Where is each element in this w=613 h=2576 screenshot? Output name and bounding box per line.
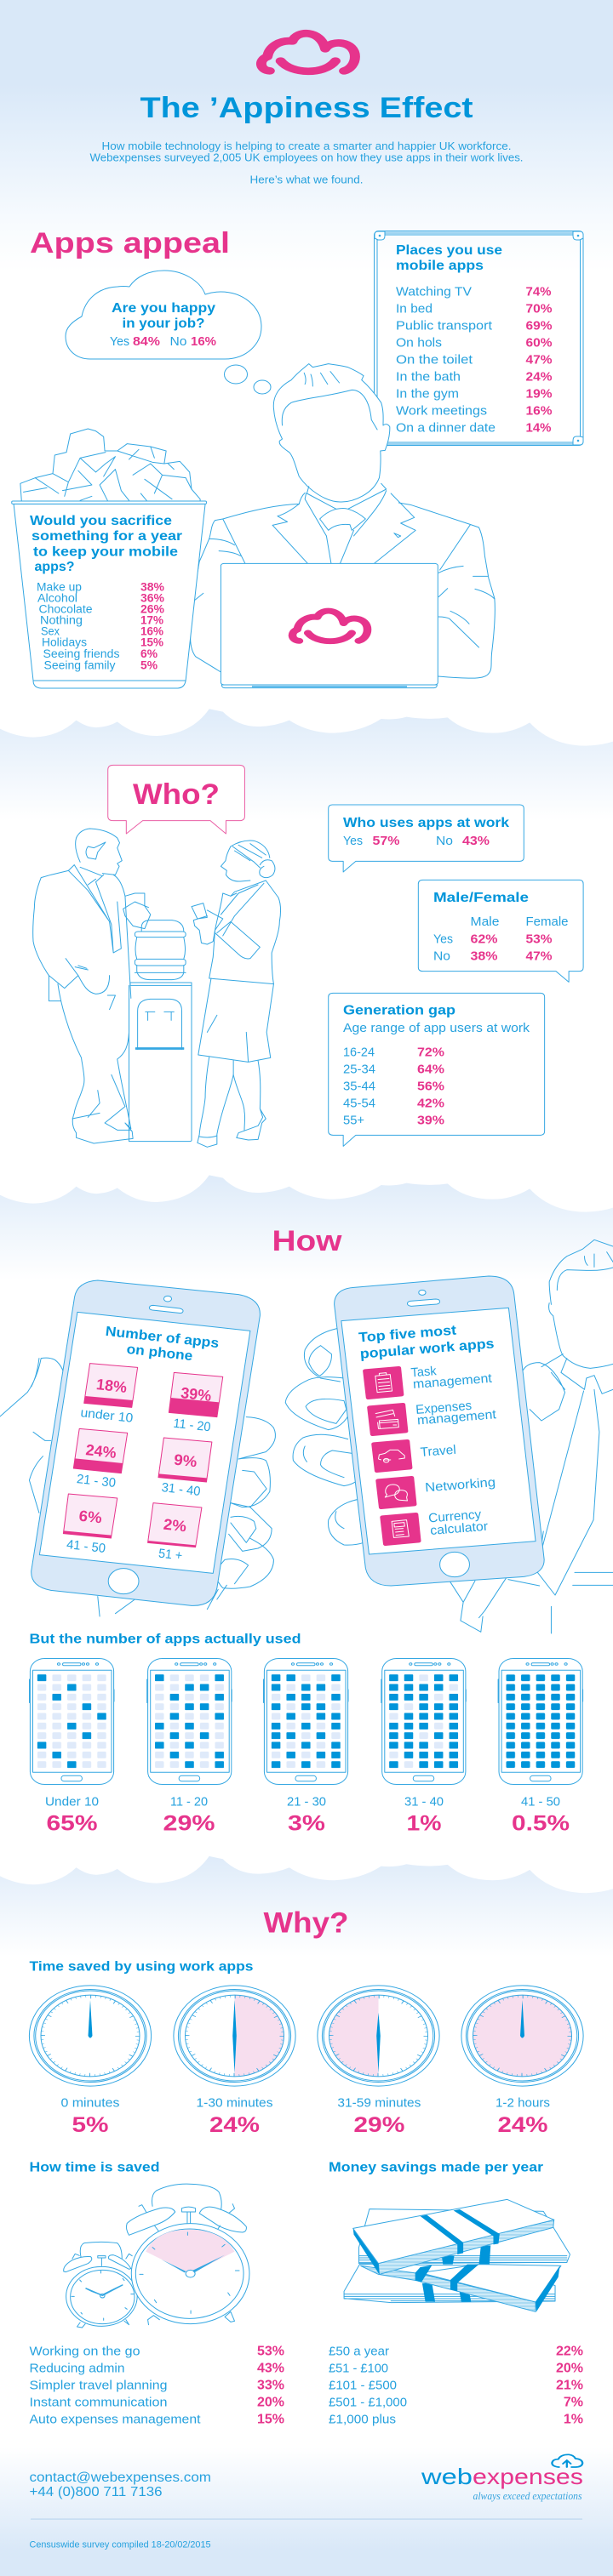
clock: 1-2 hours	[461, 1986, 583, 2137]
panel: places you use mobile apps: In bed	[396, 301, 433, 316]
panel: would you sacrifice something: 16%	[140, 624, 163, 638]
illustration: man at water cooler	[33, 829, 192, 1143]
clock: 1-30 minutes: 24%	[209, 2113, 260, 2137]
panel: would you sacrifice something: 38%	[140, 580, 164, 594]
panel: would you sacrifice something: Chocolate	[39, 602, 92, 616]
panel: places you use mobile apps: 14%	[526, 420, 552, 436]
speech bubble: who uses apps at work: No	[436, 834, 453, 848]
panel: places you use mobile apps: 74%	[526, 284, 552, 299]
icon: laptop cloud logo	[293, 611, 368, 641]
icon: expenses cards	[370, 1405, 406, 1434]
panel: places you use mobile apps: 47%	[526, 352, 552, 368]
panel: places you use mobile apps: Watching TV	[396, 284, 472, 299]
phone: top five most popular work apps: Top five most	[358, 1323, 457, 1345]
panel: places you use mobile apps: On a dinner date	[396, 420, 496, 436]
list: how time is saved: Reducing admin	[29, 2362, 124, 2375]
thought cloud: happy in your job: No	[170, 334, 187, 349]
tiles: share by number of apps	[63, 1364, 223, 1564]
speech bubble: generation gap: 45-54	[343, 1096, 375, 1111]
panel: would you sacrifice something: Seeing friends	[43, 647, 120, 660]
illustration: woman with phone	[192, 841, 281, 1147]
heading: How: How	[272, 1225, 342, 1257]
panel: places you use mobile apps: Public transport	[396, 318, 493, 333]
intro text	[90, 140, 523, 185]
panel: would you sacrifice something: Holidays	[42, 636, 87, 648]
phone chart: 31 to 40 apps: 1%	[407, 1812, 441, 1836]
illustration: alarm clocks	[64, 2184, 249, 2328]
list: how time is saved: Simpler travel planning	[29, 2379, 167, 2392]
footer divider	[31, 2518, 582, 2520]
tiles: share by number of apps: 18%	[95, 1376, 128, 1396]
phone: top five most popular work apps: management	[412, 1371, 493, 1392]
list: how time is saved: Auto expenses management	[29, 2413, 201, 2426]
speech bubble: generation gap: 56%	[417, 1079, 444, 1094]
panel: would you sacrifice something: Sex	[41, 624, 60, 638]
tiles: share by number of apps: 21 - 30	[76, 1472, 117, 1490]
thought cloud: happy in your job: 16%	[191, 334, 216, 349]
phone: number of apps on phone: Number of apps	[105, 1325, 220, 1351]
phone: top five most popular work apps: popular work apps	[359, 1336, 495, 1362]
tiles: share by number of apps: 31 - 40	[161, 1480, 201, 1499]
panel: would you sacrifice something: to keep your mobile	[33, 544, 178, 560]
phone: top five most popular work apps: Expenses	[415, 1399, 473, 1417]
speech bubble: male and female: Yes	[433, 932, 453, 946]
thought cloud: happy in your job: 84%	[133, 334, 160, 349]
clock: 0 minutes	[29, 1986, 152, 2137]
icon: networking chat bubbles	[378, 1478, 415, 1507]
laptop base bar	[252, 686, 407, 687]
phone chart: 21 to 30 apps	[264, 1659, 348, 1836]
speech bubble: male and female: 62%	[470, 932, 497, 946]
contact details: +44 (0)800 711 7136	[29, 2485, 163, 2499]
phone chart: under 10 apps: 65%	[46, 1812, 97, 1836]
list: how time is saved: 20%	[257, 2396, 284, 2409]
thought cloud: happy in your job: Yes	[110, 334, 129, 349]
phone chart: 31 to 40 apps	[381, 1659, 466, 1836]
speech bubble: Who?	[108, 765, 244, 834]
phone chart: 31 to 40 apps: 31 - 40	[404, 1795, 444, 1809]
heading: number of apps actually used: But the number of apps actually used	[29, 1632, 301, 1647]
thought cloud: happy in your job: Are you happy	[112, 301, 215, 316]
heading: money savings made per year: Money savings made per year	[329, 2161, 543, 2174]
phone: top five most popular work apps: management	[416, 1407, 497, 1428]
panel: would you sacrifice something: 6%	[140, 647, 158, 660]
phone: top five most popular work apps: Travel	[420, 1443, 456, 1460]
panel: places you use mobile apps: mobile apps	[396, 259, 484, 273]
list: money savings: £501 - £1,000	[329, 2396, 407, 2409]
panel: would you sacrifice something: 36%	[140, 592, 164, 604]
phone chart: 11 to 20 apps: 29%	[163, 1812, 215, 1836]
contact details	[29, 2471, 211, 2499]
icon: travel car	[374, 1441, 410, 1471]
speech bubble: male and female: 38%	[470, 949, 497, 963]
phone chart: 21 to 30 apps: 21 - 30	[287, 1795, 326, 1809]
intro text: Webexpenses surveyed 2,005 UK employees on how they use apps in their work lives.	[90, 151, 523, 163]
panel: places you use mobile apps: On the toilet	[396, 352, 473, 368]
illustration: hands and man behind phones	[0, 1240, 613, 1633]
list: how time is saved: 15%	[257, 2413, 284, 2426]
panel: would you sacrifice something: Nothing	[40, 614, 83, 626]
speech bubble: generation gap: 16-24	[343, 1045, 375, 1060]
clock: 31-59 minutes: 31-59 minutes	[337, 2096, 421, 2110]
thought cloud: happy in your job: in your job?	[123, 316, 204, 331]
phone chart: 11 to 20 apps: 11 - 20	[170, 1795, 208, 1809]
logo: webexpenses	[421, 2454, 583, 2502]
speech bubble: generation gap: 39%	[417, 1113, 444, 1128]
tiles: share by number of apps: 9%	[173, 1451, 198, 1470]
list: money savings	[329, 2345, 583, 2426]
phone: top five most popular work apps: Networking	[425, 1475, 496, 1495]
panel: places you use mobile apps: 19%	[526, 386, 552, 402]
tiles: share by number of apps: 24%	[85, 1441, 117, 1462]
panel: would you sacrifice something: 26%	[140, 602, 164, 616]
panel: would you sacrifice something: Make up	[37, 580, 82, 594]
list: money savings: 22%	[556, 2345, 583, 2358]
phone chart: 11 to 20 apps	[147, 1659, 232, 1836]
speech bubble: generation gap: 72%	[417, 1045, 444, 1060]
phone: number of apps on phone: on phone	[126, 1342, 193, 1364]
list: how time is saved: 43%	[257, 2362, 284, 2375]
intro text: How mobile technology is helping to create a smarter and happier UK workforce.	[102, 140, 511, 152]
speech bubble: male and female: No	[433, 949, 450, 963]
list: how time is saved	[29, 2345, 284, 2426]
speech bubble: male and female: 53%	[526, 932, 552, 946]
clock: 1-2 hours: 24%	[497, 2113, 548, 2137]
heading: Apps appeal: Apps appeal	[30, 227, 230, 259]
speech bubble: generation gap: 64%	[417, 1062, 444, 1077]
clock: 1-30 minutes	[174, 1986, 295, 2137]
speech bubble: who uses apps at work: 43%	[462, 834, 490, 848]
clock: 31-59 minutes: 29%	[353, 2113, 404, 2137]
tiles: share by number of apps: 11 - 20	[173, 1416, 211, 1434]
tiles: share by number of apps: 6%	[78, 1507, 103, 1526]
speech bubble: generation gap: Age range of app users at work	[343, 1021, 530, 1035]
list: money savings: 20%	[556, 2362, 583, 2375]
panel: places you use mobile apps: 16%	[526, 403, 552, 419]
list: how time is saved: Working on the go	[29, 2345, 140, 2358]
panel: would you sacrifice something: 15%	[140, 636, 163, 648]
illustration: stacks of money	[344, 2199, 570, 2311]
phone: top five most popular work apps: Currency	[428, 1507, 482, 1525]
panel: places you use mobile apps: Places you use	[396, 243, 502, 258]
alarm clock dial: pink wedge and hands	[140, 2230, 239, 2313]
tiles: share by number of apps: 2%	[163, 1516, 187, 1535]
speech bubble: male and female: 47%	[526, 949, 552, 963]
phone: top five most popular work apps	[335, 1276, 544, 1586]
title: The ’Appiness Effect	[140, 92, 473, 124]
icon: currency calculator	[382, 1514, 419, 1544]
speech bubble: generation gap: Generation gap	[343, 1004, 455, 1017]
speech bubble: generation gap	[329, 993, 545, 1146]
list: money savings: £1,000 plus	[329, 2413, 396, 2426]
intro text: Here’s what we found.	[250, 174, 363, 185]
tiles: share by number of apps: under 10	[80, 1405, 134, 1426]
clock: 0 minutes: 0 minutes	[61, 2096, 119, 2110]
list: money savings: 7%	[564, 2396, 583, 2409]
panel: would you sacrifice something	[30, 514, 182, 672]
panel: places you use mobile apps: On hols	[396, 335, 442, 350]
speech bubble: who uses apps at work: Yes	[343, 834, 363, 848]
panel: places you use mobile apps: 70%	[526, 301, 552, 316]
heading: time saved by using work apps: Time saved by using work apps	[29, 1960, 254, 1974]
list: how time is saved: 33%	[257, 2379, 284, 2392]
logo: webexpenses: expenses	[473, 2464, 583, 2489]
contact details: contact@webexpenses.com	[29, 2471, 211, 2485]
speech bubble: male and female: Female	[526, 915, 569, 929]
illustration: man in suit with laptop	[191, 364, 495, 688]
thought cloud: happy in your job	[66, 271, 271, 394]
list: how time is saved: 53%	[257, 2345, 284, 2358]
list: how time is saved: Instant communication	[29, 2396, 168, 2409]
list: money savings: £101 - £500	[329, 2379, 397, 2392]
panel: places you use mobile apps	[375, 231, 583, 446]
panel: would you sacrifice something: something for a year	[32, 529, 182, 544]
heading: how time is saved: How time is saved	[29, 2161, 160, 2174]
clock: 0 minutes: 5%	[72, 2113, 109, 2137]
logo: webexpenses: web	[421, 2464, 473, 2489]
speech bubble: generation gap: 35-44	[343, 1079, 375, 1094]
speech bubble: who uses apps at work: Who uses apps at work	[343, 816, 509, 830]
panel: would you sacrifice something: Seeing family	[44, 658, 116, 672]
list: money savings: 1%	[564, 2413, 583, 2426]
speech bubble: male and female: Male/Female	[433, 891, 529, 905]
phone chart: under 10 apps	[29, 1659, 114, 1836]
heading: Why?: Why?	[264, 1907, 349, 1940]
tiles: share by number of apps: 39%	[180, 1384, 212, 1405]
list: money savings: £50 a year	[329, 2345, 389, 2358]
speech bubble: generation gap: 42%	[417, 1096, 444, 1111]
list: money savings: £51 - £100	[329, 2362, 388, 2375]
phone chart: 21 to 30 apps: 3%	[288, 1812, 325, 1836]
phone: top five most popular work apps: Task	[410, 1364, 438, 1380]
panel: would you sacrifice something: apps?	[34, 560, 75, 574]
clock: 1-30 minutes: 1-30 minutes	[196, 2096, 272, 2110]
clock: 1-2 hours: 1-2 hours	[496, 2096, 550, 2110]
speech bubble: male and female: Male	[470, 915, 499, 929]
phone: number of apps on phone	[32, 1280, 260, 1605]
phone: top five most popular work apps: calculator	[430, 1519, 489, 1538]
icon: task clipboard	[365, 1368, 402, 1398]
logo: webexpenses: always exceed expectations	[473, 2489, 582, 2502]
panel: places you use mobile apps: In the bath	[396, 369, 461, 385]
panel: places you use mobile apps: Work meetings	[396, 403, 487, 419]
panel: would you sacrifice something: Alcohol	[37, 592, 77, 604]
clock: 31-59 minutes	[318, 1986, 439, 2137]
panel: places you use mobile apps: In the gym	[396, 386, 459, 402]
panel: would you sacrifice something: 17%	[140, 614, 163, 626]
phone chart: 41 to 50 apps: 41 - 50	[521, 1795, 560, 1809]
speech bubble: generation gap: 25-34	[343, 1062, 375, 1077]
tiles: share by number of apps: 41 - 50	[66, 1537, 106, 1556]
panel: would you sacrifice something: 5%	[140, 658, 158, 672]
speech bubble: who uses apps at work	[329, 805, 524, 872]
speech bubble: generation gap: 55+	[343, 1113, 364, 1128]
illustration: bin with crumpled paper	[12, 429, 206, 688]
speech bubble: male and female	[418, 880, 583, 982]
icon: smiling cloud logo	[261, 33, 355, 71]
list: money savings: 21%	[556, 2379, 583, 2392]
source note: Censuswide survey compiled 18-20/02/2015	[29, 2540, 211, 2550]
panel: would you sacrifice something: Would you sacrifice	[30, 514, 172, 528]
phone chart: 41 to 50 apps: 0.5%	[512, 1812, 570, 1836]
speech bubble: Who?: Who?	[133, 778, 220, 811]
panel: places you use mobile apps: 60%	[526, 335, 552, 350]
phone chart: under 10 apps: Under 10	[45, 1795, 99, 1809]
tiles: share by number of apps: 51 +	[158, 1547, 183, 1564]
phone chart: 41 to 50 apps	[498, 1659, 583, 1836]
panel: places you use mobile apps: 24%	[526, 369, 552, 385]
speech bubble: who uses apps at work: 57%	[373, 834, 400, 848]
panel: places you use mobile apps: 69%	[526, 318, 552, 333]
